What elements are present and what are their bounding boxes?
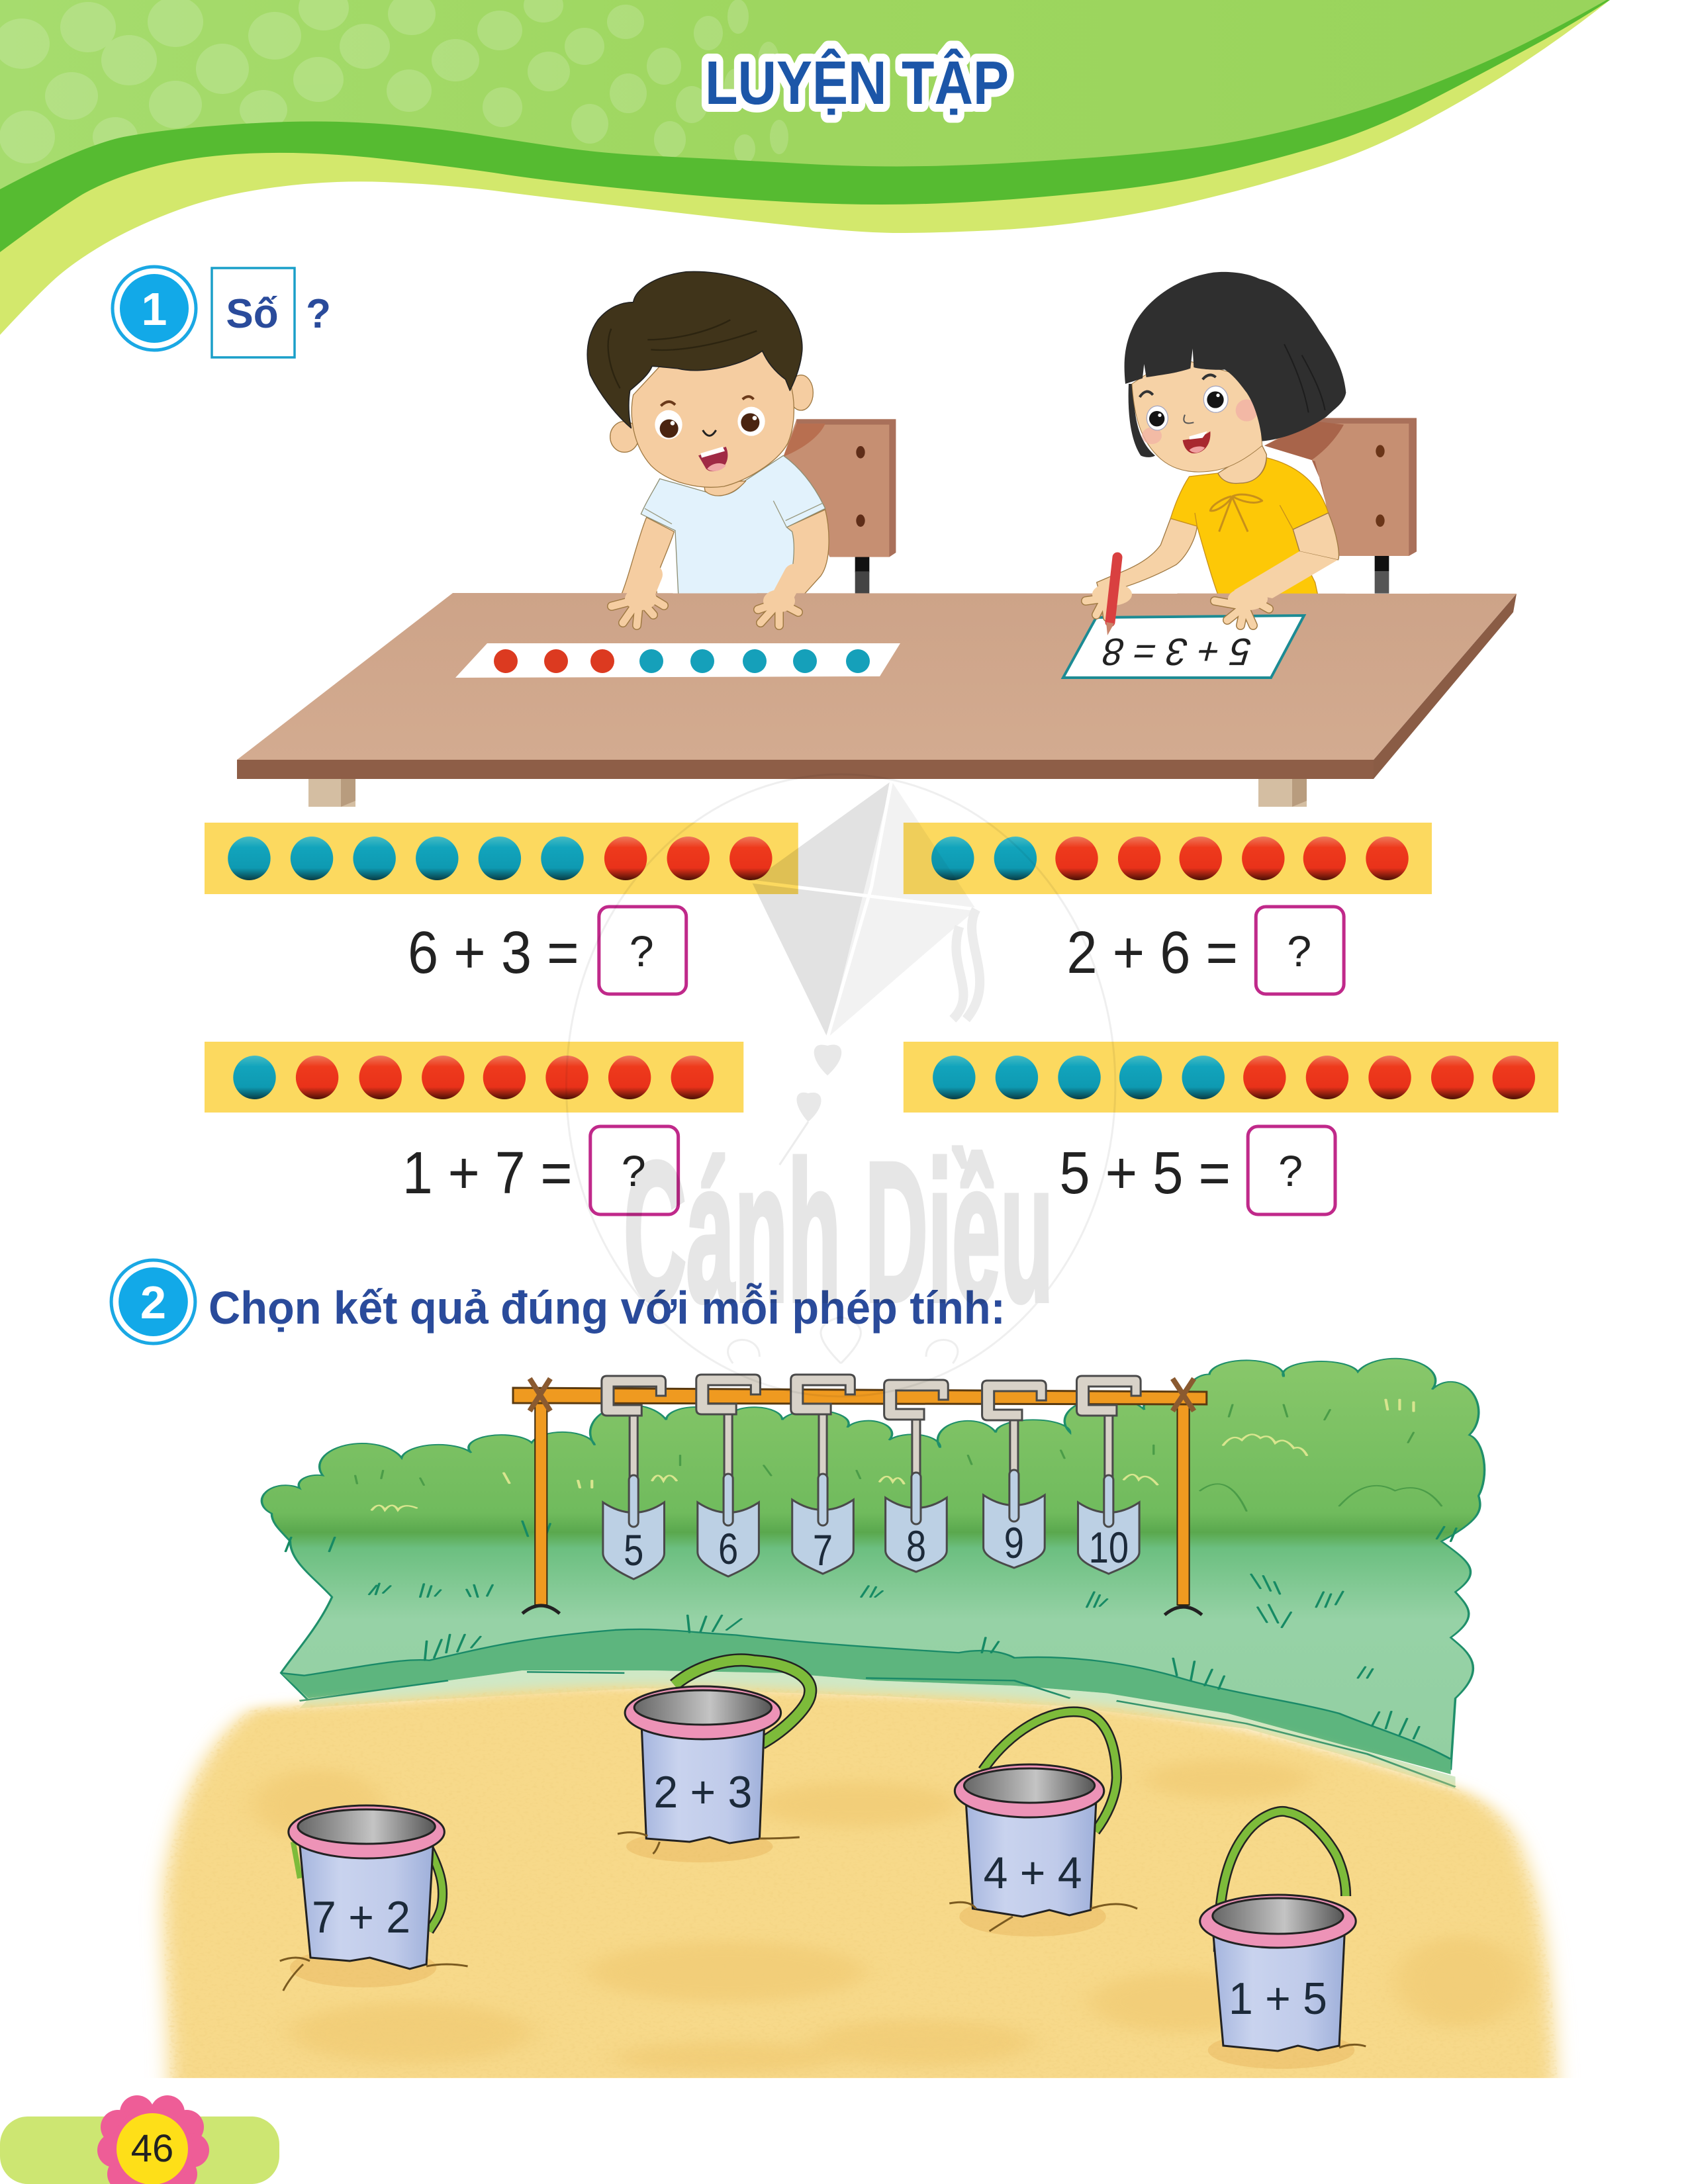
shovel 7: 7 — [813, 1526, 833, 1575]
workbook page: Cánh Diều — [624, 1121, 1053, 1343]
shovel 5: 5 — [624, 1526, 643, 1575]
exercise 1 number badge: 1 — [142, 283, 167, 335]
shovels on a rack — [513, 1375, 1207, 1615]
bucket 2 + 3: 2 + 3 — [653, 1767, 752, 1817]
shovel 7 — [791, 1375, 855, 1575]
face — [632, 351, 794, 487]
exercise 1 instruction: Số ?: Số — [226, 291, 279, 337]
shovel 6 — [696, 1375, 760, 1576]
header banner — [0, 0, 1610, 335]
exercise 1 instruction: Số ?: ? — [306, 291, 331, 337]
shirt — [641, 455, 825, 598]
eyes — [1147, 406, 1168, 430]
pale band at the water's edge — [299, 1670, 1456, 1790]
illustration: field and bushes — [261, 1359, 1485, 1790]
sand — [164, 1686, 1558, 2103]
right upper arm — [1293, 513, 1338, 560]
bucket 1 + 5: 1 + 5 — [1229, 1974, 1327, 2024]
girl — [1097, 272, 1346, 598]
equation 2 + 6 — [1066, 907, 1344, 994]
table — [237, 593, 1517, 807]
right arm — [773, 510, 829, 598]
equation 5 + 5: 5 + 5 = — [1059, 1140, 1231, 1206]
exercise 1 number badge — [113, 267, 196, 350]
bead bars, equations and exercise 2 heading — [111, 823, 1558, 1343]
bucket 7 + 2: 7 + 2 — [312, 1892, 410, 1942]
hair — [1125, 272, 1346, 441]
bucket 2 + 3 — [618, 1660, 810, 1862]
answer card on table: 5 + 3 = 8 — [1098, 630, 1256, 672]
face — [1132, 362, 1262, 472]
mouth — [1183, 432, 1211, 453]
nose — [1184, 415, 1194, 423]
hair — [587, 271, 802, 428]
shovel 9: 9 — [1004, 1519, 1024, 1568]
shovel 5 — [602, 1376, 665, 1579]
exercise 2 number badge: 2 — [140, 1276, 166, 1328]
bucket 1 + 5 — [1200, 1811, 1366, 2069]
equation 6 + 3 — [408, 907, 686, 994]
equation 5 + 5: ? — [1278, 1147, 1303, 1196]
shovel 9 — [982, 1381, 1046, 1568]
answer card on table — [1063, 615, 1304, 678]
left arm — [1097, 518, 1197, 598]
equation 2 + 6: ? — [1287, 927, 1311, 976]
shirt — [1170, 458, 1329, 598]
equation 1 + 7: ? — [622, 1147, 646, 1196]
bucket 4 + 4: 4 + 4 — [984, 1848, 1082, 1898]
equation 2 + 6: 2 + 6 = — [1066, 919, 1238, 986]
rack — [513, 1379, 1207, 1615]
equation 1 + 7 — [402, 1126, 679, 1214]
shovel 6: 6 — [718, 1525, 738, 1574]
exercise 2 instruction: Chọn kết quả đúng với mỗi phép tính: — [209, 1281, 1006, 1334]
left arm — [620, 518, 674, 598]
girl's chair — [1264, 418, 1417, 594]
shovel 10 — [1077, 1376, 1141, 1574]
eyes — [655, 410, 682, 439]
shovel 8: 8 — [906, 1522, 926, 1571]
equation 5 + 5 — [1059, 1126, 1335, 1214]
ears — [610, 422, 639, 452]
mouth — [698, 447, 727, 471]
buckets — [280, 1660, 1366, 2069]
equation 6 + 3: 6 + 3 = — [408, 919, 579, 986]
grass tufts — [285, 1521, 1456, 1739]
page number tab — [0, 2095, 279, 2184]
boy's hands — [612, 574, 798, 625]
shovel 8 — [884, 1380, 948, 1572]
girl's right forearm and hand — [1215, 551, 1338, 625]
bead bar: 1 teal, 7 red — [205, 1042, 743, 1113]
boy's chair — [783, 419, 896, 594]
title: LUYỆN TẬP — [705, 48, 1009, 117]
bead strip on table — [455, 643, 900, 678]
equation 1 + 7: 1 + 7 = — [402, 1140, 573, 1206]
bucket 7 + 2 — [280, 1805, 468, 1991]
shore dashes — [299, 1672, 1456, 1787]
nose — [703, 430, 716, 435]
bead bar: 6 teal, 3 red — [205, 823, 798, 894]
bead bar: 2 teal, 6 red — [904, 823, 1432, 894]
equation 6 + 3: ? — [630, 927, 654, 976]
boy — [587, 271, 829, 598]
page number tab: 46 — [131, 2127, 173, 2170]
bead bar: 5 teal, 5 red — [904, 1042, 1558, 1113]
exercise 2 number badge — [111, 1260, 195, 1343]
exercise 1 instruction: Số ? — [212, 268, 331, 357]
watermark: kite logo — [567, 774, 1115, 1396]
bush marks — [355, 1404, 1442, 1511]
pencil and girl's left hand — [1086, 557, 1132, 635]
shore band — [281, 1629, 1451, 1774]
shovel 10: 10 — [1089, 1524, 1129, 1572]
hair back strand — [1129, 384, 1155, 457]
flower — [97, 2095, 209, 2184]
bucket 4 + 4 — [949, 1711, 1137, 1936]
neck — [1218, 445, 1266, 483]
